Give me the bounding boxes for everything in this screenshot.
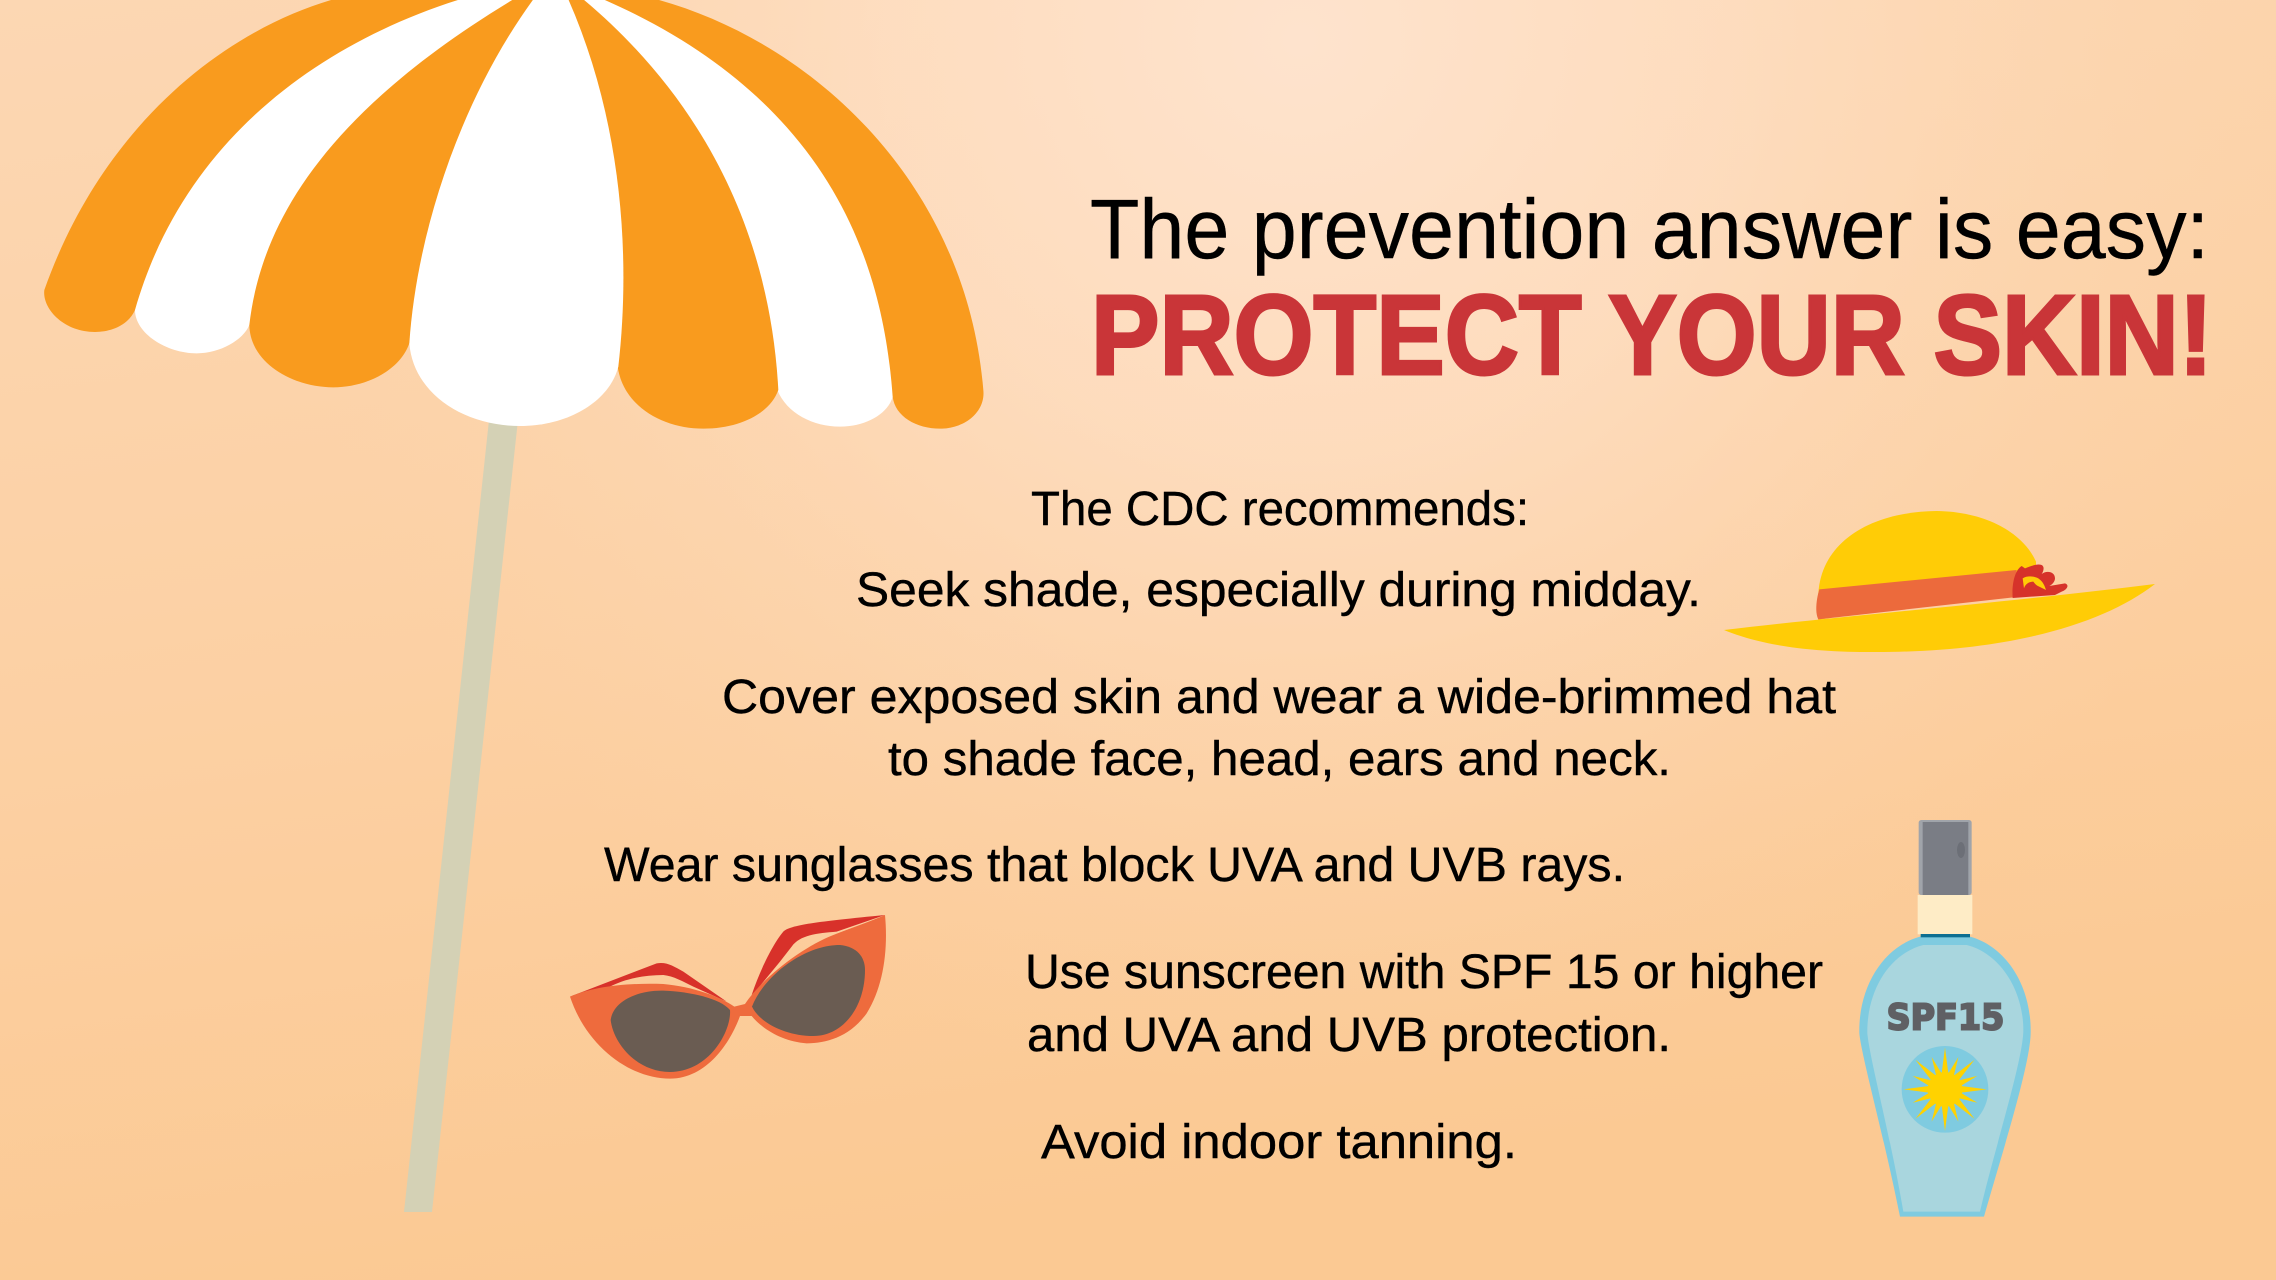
icon: sunglasses	[570, 915, 886, 1079]
icon: sunscreen bottle: SPF15	[1887, 997, 2004, 1038]
tip: sunscreen: and UVA and UVB protection.	[1027, 1009, 1671, 1062]
icon: sunscreen bottle	[1859, 820, 2031, 1217]
tip: sunglasses: Wear sunglasses that block UVA and UVB rays.	[604, 839, 1625, 892]
tip: cover skin: Cover exposed skin and wear a wide-brimmed hat	[722, 671, 1836, 724]
tip: sunscreen	[1025, 946, 1823, 1062]
tip: cover skin	[722, 671, 1836, 786]
tip: sunscreen: Use sunscreen with SPF 15 or higher	[1025, 946, 1823, 999]
tip: cover skin: to shade face, head, ears and neck.	[888, 733, 1671, 786]
tip: tanning: Avoid indoor tanning.	[1041, 1116, 1517, 1169]
icon: beach umbrella	[44, 0, 984, 1212]
umbrella pole	[404, 420, 518, 1212]
icon: sun hat	[1724, 511, 2155, 652]
heading	[1090, 182, 2213, 398]
recommendations text	[604, 483, 1836, 1169]
umbrella canopy	[44, 0, 984, 429]
intro line: The CDC recommends:	[1031, 483, 1529, 536]
heading line 1: The prevention answer is easy:	[1090, 182, 2209, 276]
tip: shade: Seek shade, especially during midday.	[856, 564, 1701, 617]
